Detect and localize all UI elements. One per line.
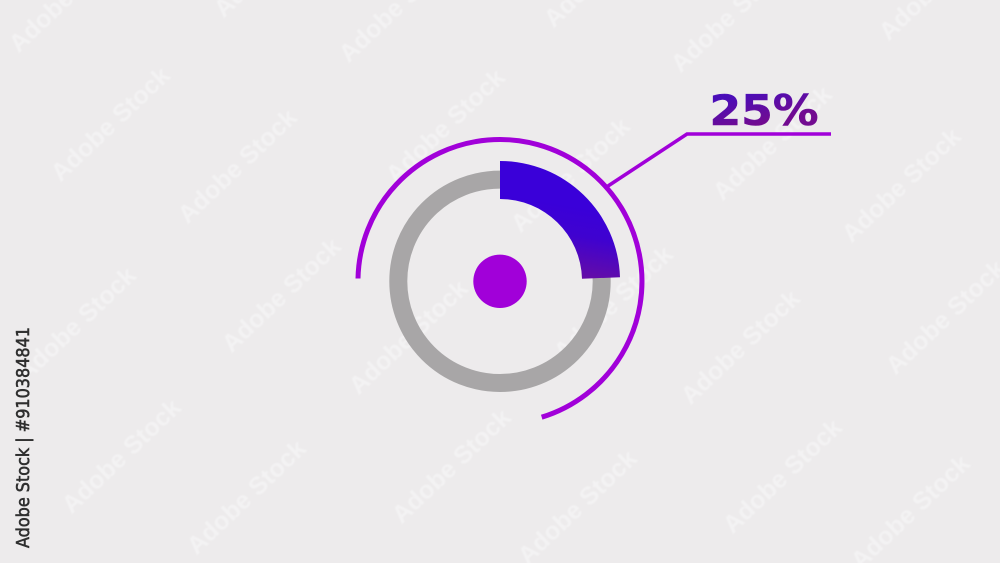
watermark pattern: Adobe Stock [707,80,838,206]
chart: outer purple arc [358,139,642,417]
watermark pattern: Adobe Stock [45,61,176,187]
callout leader line [608,134,831,186]
watermark pattern: Adobe Stock [181,434,312,560]
watermark pattern: Adobe Stock [386,403,517,529]
chart: centre dot [473,255,527,308]
watermark pattern: Adobe Stock [380,63,511,189]
watermark pattern: Adobe Stock [717,413,848,539]
callout value: 25%: 25% [710,86,818,135]
watermark pattern: Adobe Stock [836,122,967,248]
watermark pattern: Adobe Stock [505,112,636,238]
watermark pattern: Adobe Stock [216,232,347,358]
watermark pattern: Adobe Stock [56,393,187,519]
chart: 25% highlighted arc segment [500,161,620,279]
chart: gray base ring [398,180,602,383]
watermark pattern: Adobe Stock [675,284,806,410]
stock image id caption: Adobe Stock | #910384841 [13,327,34,548]
watermark pattern: Adobe Stock [11,261,142,387]
watermark pattern: Adobe Stock [548,240,679,366]
watermark pattern: Adobe Stock [343,274,474,400]
watermark pattern: Adobe Stock [172,103,303,229]
